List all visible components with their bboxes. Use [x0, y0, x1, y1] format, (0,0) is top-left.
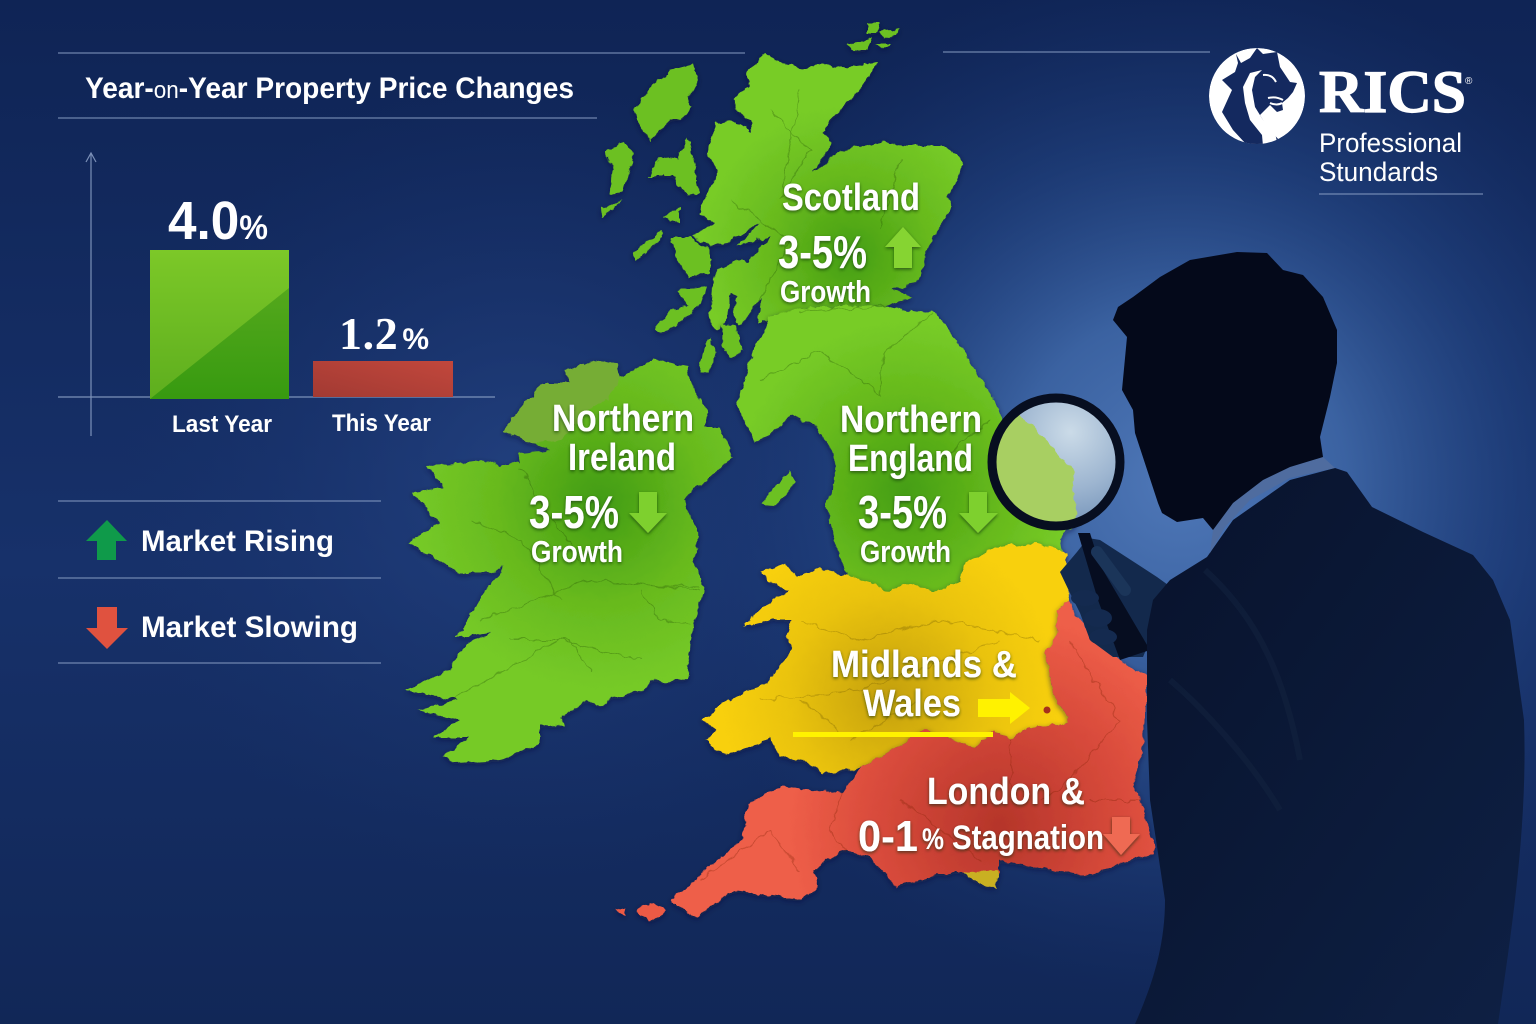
label: last year: Last Year [172, 411, 272, 438]
subtitle line 1: Professional [1319, 128, 1462, 158]
label: Northern England [840, 399, 998, 569]
region: islands [602, 23, 900, 922]
head [1113, 252, 1337, 530]
registered mark: ® [1465, 76, 1473, 87]
label: Scotland [778, 177, 921, 309]
lens [996, 402, 1116, 522]
label: Northern Ireland [529, 398, 694, 569]
region: Ireland [405, 360, 733, 763]
label: Midlands and Wales: Midlands & [831, 644, 1017, 686]
icon: slowing arrow [86, 607, 128, 649]
label: London: Stagnation [952, 819, 1104, 857]
label: this year: This Year [332, 410, 431, 437]
man silhouette [1060, 252, 1525, 1024]
marker: town dot [1044, 706, 1050, 714]
label: Northern Ireland: Ireland [568, 437, 676, 479]
label: London [858, 771, 1140, 861]
bar: last year [150, 250, 289, 399]
value: 4.0%: 4.0% [168, 191, 268, 251]
label: London: 0-1 [858, 812, 918, 861]
shirt collar [1210, 457, 1335, 553]
region: Scotland mainland [693, 53, 963, 332]
label: Northern Ireland: Northern [552, 398, 694, 440]
county boundary lines [450, 90, 1140, 880]
wordmark: RICS [1319, 59, 1466, 125]
label: Northern Ireland: 3-5% [529, 486, 619, 538]
bar chart [58, 153, 495, 438]
label: Scotland: 3-5% [778, 226, 867, 278]
label: Northern England: England [848, 438, 973, 480]
label: London: London & [927, 771, 1085, 813]
label: Northern England: Growth [860, 534, 951, 569]
icon: rising arrow [86, 520, 127, 560]
label: Northern Ireland: Growth [531, 534, 623, 569]
rim [992, 398, 1120, 526]
chart axes [58, 153, 495, 436]
region: Northern England [737, 306, 1078, 610]
label: Scotland: Growth [780, 274, 871, 309]
title: Year-on-Year Property Price Changes [85, 72, 574, 105]
hand [1060, 533, 1175, 660]
label: Midlands and Wales [793, 644, 1030, 737]
label: Northern England: Northern [840, 399, 982, 441]
label: market rising: Market Rising [141, 525, 334, 558]
icon: lion crest [1209, 48, 1305, 148]
subtitle line 2: Stundards [1319, 157, 1438, 187]
region: London and South [671, 600, 1156, 917]
map of UK and Ireland [405, 23, 1156, 922]
logo: RICS [1209, 48, 1473, 187]
label: London: % [922, 823, 944, 856]
suit body [1135, 468, 1525, 1024]
label: Scotland: Scotland [782, 177, 920, 219]
value: 1.2%: 1.2% [339, 308, 429, 359]
heading rules [58, 52, 1483, 663]
region: Midlands and Wales [703, 543, 1069, 773]
label: Northern England: 3-5% [858, 486, 947, 538]
label: market slowing: Market Slowing [141, 611, 358, 644]
bar: this year [313, 361, 453, 397]
magnifying glass [985, 395, 1120, 530]
legend [86, 520, 358, 649]
label: Midlands and Wales: Wales [863, 683, 961, 725]
